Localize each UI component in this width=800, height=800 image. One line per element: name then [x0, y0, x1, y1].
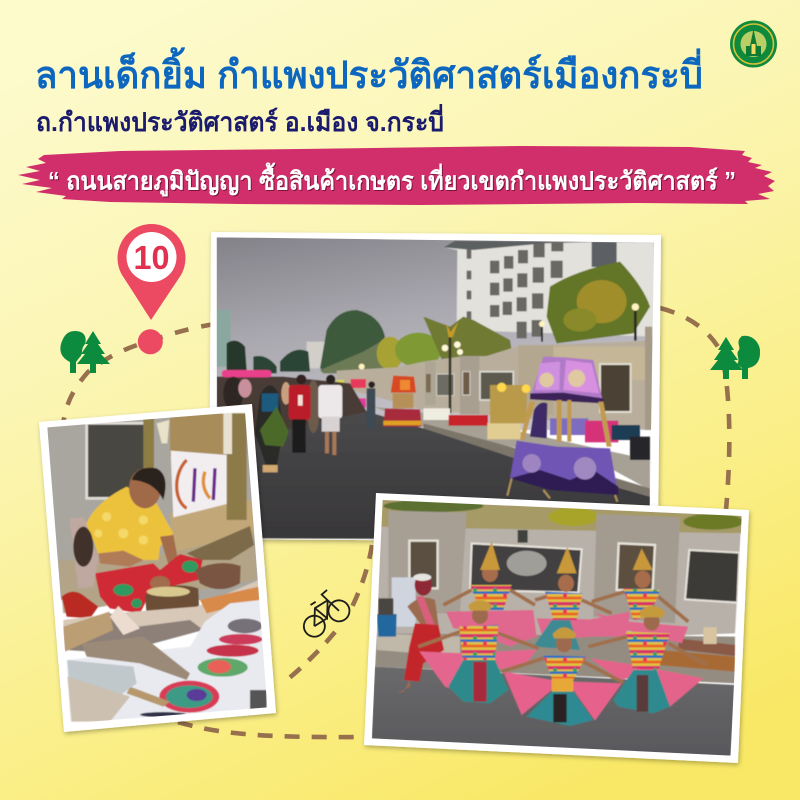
center front dancer [502, 627, 623, 726]
wall [377, 527, 741, 647]
coloured puppet discs [228, 619, 262, 633]
bamboo fence [170, 500, 253, 557]
big purple lantern bottom [509, 440, 617, 486]
man in white [326, 375, 335, 384]
title: ลานเด็กยิ้ม กำแพงประวัติศาสตร์เมืองกระบี่ [35, 47, 703, 97]
poster [171, 451, 227, 517]
icon: trees left [60, 331, 110, 373]
front dancers wings [419, 649, 537, 690]
wall [337, 341, 652, 430]
big purple lantern top [530, 357, 603, 403]
white building [443, 241, 654, 338]
photo: craftsman making shadow puppets [39, 404, 277, 732]
banner: brush stroke slogan [18, 146, 775, 205]
icon: map pin number 10: 10 [134, 239, 170, 276]
stall tables [423, 408, 450, 420]
dashed route [63, 308, 729, 737]
man [85, 487, 173, 560]
right front dancer [588, 606, 707, 713]
poster board left [392, 577, 416, 627]
sidewalk and kerb [373, 407, 650, 490]
white cardboard sheet [67, 600, 268, 722]
man in red [296, 374, 306, 384]
left front dancer [418, 600, 538, 703]
subtitle: location: ถ.กำแพงประวัติศาสตร์ อ.เมือง จ.กระบี่ [36, 103, 444, 137]
wall [47, 418, 260, 600]
ledge and road [375, 633, 735, 683]
icon: bicycle [293, 585, 353, 641]
logo badge [730, 20, 777, 68]
crowd [217, 377, 367, 437]
woman in blue [255, 385, 283, 467]
banner: brush stroke slogan: “ ถนนสายภูมิปัญญา ซื้อสินค้าเกษตร เที่ยวเขตกำแพงประวัติศาสตร์ ” [49, 162, 737, 198]
route dot [138, 329, 163, 354]
back row wings [446, 610, 537, 647]
photo: night market street [209, 230, 670, 542]
road [253, 408, 651, 540]
sky [210, 230, 670, 430]
sarong [95, 554, 203, 613]
icon: trees right [710, 336, 760, 379]
ground and bench [58, 533, 257, 613]
stumps [144, 584, 200, 612]
table right [658, 650, 735, 672]
street lights [449, 330, 451, 413]
back dancers [443, 542, 688, 650]
man in grey [368, 381, 375, 388]
left buildings and trees [217, 310, 231, 367]
pink stall [351, 379, 366, 388]
garden behind wall [381, 500, 742, 534]
photo: dancers in costume [364, 493, 749, 763]
orange lantern stall [391, 376, 416, 393]
table cloth [63, 580, 260, 650]
icon: map pin number 10 [118, 224, 186, 320]
banner: brush stroke slogan: “ ถนนสายภูมิปัญญา ซื้อสินค้าเกษตร เที่ยวเขตกำแพงประวัติศาสตร์ ” [48, 162, 736, 198]
puppets [69, 517, 98, 588]
bamboo sticks bundle [82, 637, 190, 680]
red-masked man [397, 574, 444, 693]
